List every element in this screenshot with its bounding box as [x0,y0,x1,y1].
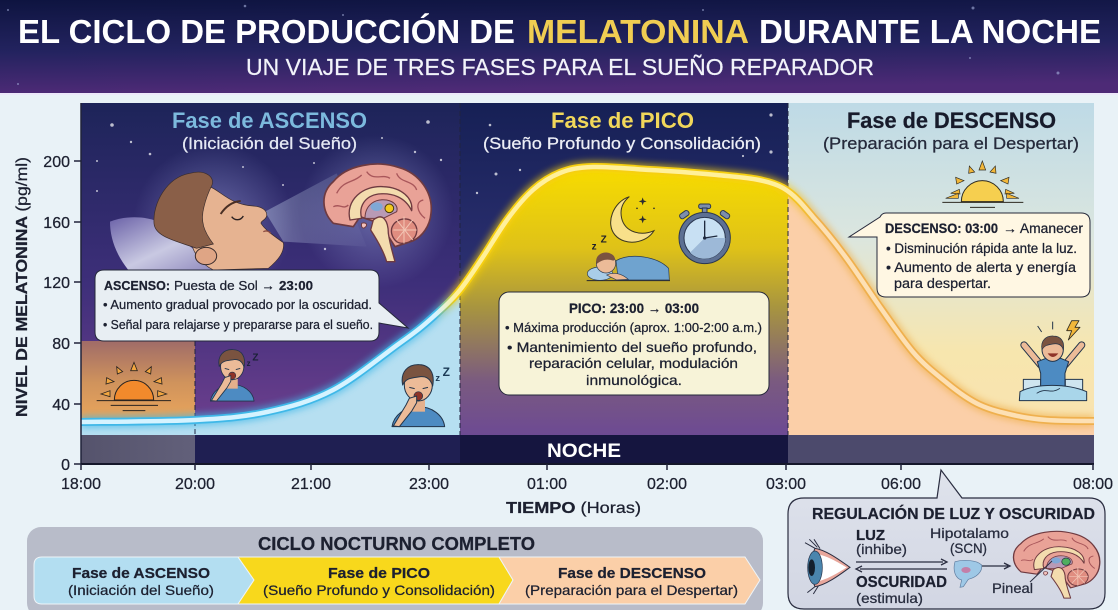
callout: pico: inmunológica. [586,372,682,388]
phase heading: ascenso: Fase de ASCENSO [172,108,367,133]
y axis: 80 [52,336,70,353]
luz label: (inhibe) [856,541,907,557]
panel: ascenso background [82,103,460,435]
icon: sunset [97,362,171,411]
phase heading: pico: (Sueño Profundo y Consolidación) [483,134,761,153]
chart: melatonin level over the night [14,103,1113,517]
icon: large yawning person: z [435,373,440,383]
panel: descenso background [788,103,1094,435]
chevron: descenso [499,557,760,604]
chevron: descenso: (Preparación para el Despertar) [525,582,738,598]
panel: pico background [460,103,788,435]
x axis: 01:00 [527,476,567,493]
x axis title: TIEMPO (Horas) [506,500,641,517]
phase heading: descenso [823,108,1079,153]
hipotálamo label [930,525,1009,556]
icon: stopwatch [679,204,731,264]
icon: small yawning person: Z [252,353,258,364]
arrow: oscuridad [856,566,947,572]
ciclo heading: CICLO NOCTURNO COMPLETO [258,534,535,554]
chevron: pico: Fase de PICO [328,565,430,582]
x axis: 02:00 [647,476,687,493]
callout: descenso: • Disminución rápida ante la luz. [886,241,1077,256]
icon: person waking up [1019,321,1087,401]
icon: small yawning person [210,350,258,401]
icon: large yawning person: Z [443,365,450,379]
callout: pico: PICO: 23:00 → 03:00 [569,300,699,316]
phase heading: descenso: (Preparación para el Despertar) [823,134,1079,153]
icon: hypothalamus [954,560,982,587]
y axis: 120 [43,275,70,292]
hipotálamo label: (SCN) [950,540,987,556]
oscuridad label: (estimula) [856,590,923,606]
callout: descenso: • Aumento de alerta y energía [886,260,1077,275]
callout: ascenso: Puesta de Sol → [174,278,275,293]
callout: pico: reparación celular, modulación [529,355,738,371]
y axis title: NIVEL DE MELATONINA (pg/ml) [14,157,31,417]
callout: pico: • Mantenimiento del sueño profundo, [507,339,757,355]
chevron: descenso: Fase de DESCENSO [558,565,706,582]
regulation heading: REGULACIÓN DE LUZ Y OSCURIDAD [812,504,1095,523]
callout: ascenso [95,270,408,341]
y axis: 160 [43,215,70,232]
x axis: 03:00 [766,476,806,493]
chevron: ascenso [34,557,254,604]
panel: regulación de luz y oscuridad [788,470,1105,609]
icon: sunrise [942,161,1023,207]
callout: descenso: → Amanecer [1003,221,1084,236]
icon: small brain [1013,531,1100,598]
phase heading: ascenso [172,108,367,153]
chevron: pico [238,557,513,604]
arrow: luz [856,559,947,565]
icon: small yawning person: z [247,359,251,368]
callout: ascenso: • Señal para relajarse y prepararse para el sueño. [103,318,373,332]
y axis [14,103,81,474]
luz label [856,527,907,557]
title [18,13,1101,50]
x axis: 08:00 [1073,476,1113,493]
noche band [81,435,1094,464]
icon: moon and sleeping person: z [592,241,597,252]
x axis: 21:00 [291,476,331,493]
header banner [0,0,1118,95]
title: MELATONINA [527,13,749,50]
phase heading: ascenso: (Iniciación del Sueño) [182,134,357,153]
callout: descenso: DESCENSO: 03:00 [885,221,998,236]
oscuridad label [856,574,947,606]
x axis: 06:00 [881,476,921,493]
subtitle: UN VIAJE DE TRES FASES PARA EL SUEÑO REPARADOR [246,54,874,80]
title: DURANTE LA NOCHE [759,13,1101,50]
callout: descenso: para despertar. [894,276,991,291]
pineal label: Pineal [992,580,1033,596]
arrow: hypothalamus to pineal [982,563,1010,569]
callout: ascenso: ASCENSO: [104,278,170,293]
panel: ciclo nocturno completo [27,527,763,610]
icon: sleeping head with beam to brain [110,135,453,303]
chevron: ascenso: (Iniciación del Sueño) [68,582,214,598]
phase dividers [195,103,788,435]
icon: large yawning person [392,365,450,427]
phase heading: pico: Fase de PICO [551,108,694,133]
callout: pico: • Máxima producción (aprox. 1:00-2:00 a.m.) [505,321,762,335]
x axis: 18:00 [61,476,101,493]
pineal label [992,561,1052,596]
x axis: 23:00 [409,476,449,493]
oscuridad label: OSCURIDAD [856,574,947,591]
title: EL CICLO DE PRODUCCIÓN DE [18,13,515,50]
chevron: pico: (Sueño Profundo y Consolidación) [263,582,495,598]
icon: moon and sleeping person: Z [601,235,607,246]
callout: descenso [849,213,1090,297]
y axis: 40 [52,397,70,414]
x axis [61,464,1113,517]
y axis: 200 [43,154,70,171]
icon: moon and sleeping person [587,197,670,281]
luz label: LUZ [856,527,885,544]
y axis: 0 [61,457,70,474]
hipotálamo label: Hipotalamo [930,525,1009,541]
phase heading: pico [483,108,761,153]
x axis: 20:00 [175,476,215,493]
callout: ascenso: 23:00 [279,278,313,293]
icon: eye [805,539,850,594]
noche label: NOCHE [547,441,621,462]
chevron: ascenso: Fase de ASCENSO [72,565,210,582]
callout: ascenso: • Aumento gradual provocado por la oscuridad. [103,298,372,312]
melatonin curve [81,167,1094,422]
callout: pico [499,292,769,395]
phase heading: descenso: Fase de DESCENSO [847,108,1056,133]
